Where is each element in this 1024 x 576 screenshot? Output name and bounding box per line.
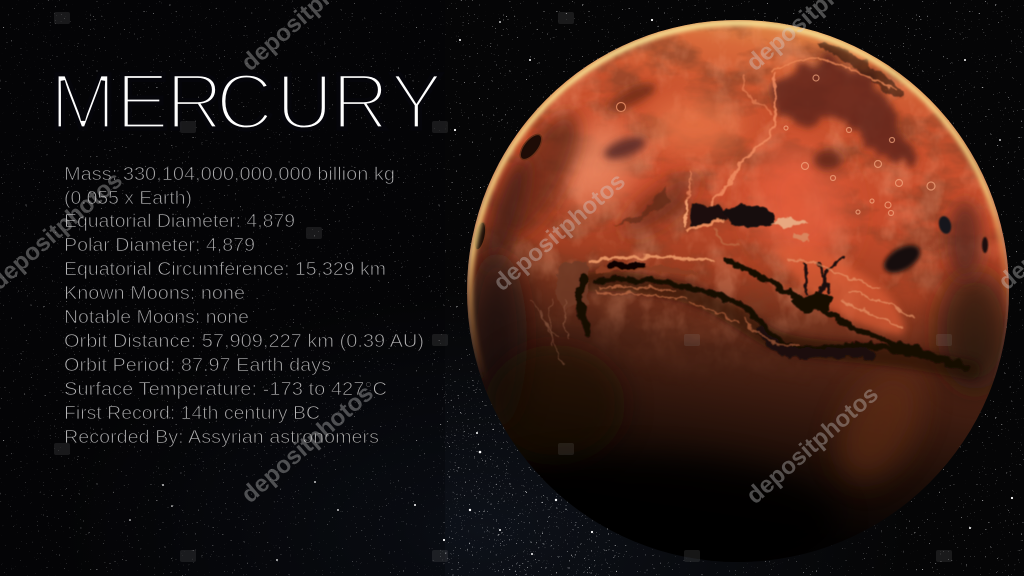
facts text block: (0.055 x Earth) bbox=[64, 187, 192, 208]
facts text block: Known Moons: none bbox=[64, 282, 245, 303]
facts text block: Mass: 330,104,000,000,000 billion kg bbox=[64, 163, 395, 184]
facts text block: Surface Temperature: -173 to 427°C bbox=[64, 378, 387, 399]
planet: craters bbox=[784, 75, 935, 216]
planet: upper canyon pits bbox=[613, 185, 810, 245]
planet: bright channel network bbox=[687, 74, 777, 220]
planet: great canyon system bbox=[530, 257, 967, 369]
facts text block: First Record: 14th century BC bbox=[64, 402, 320, 423]
facts text block: Equatorial Circumference: 15,329 km bbox=[64, 258, 386, 279]
planet: sunlit rim bbox=[467, 20, 1009, 376]
facts text block: Recorded By: Assyrian astronomers bbox=[64, 426, 379, 447]
facts text block bbox=[64, 163, 424, 447]
facts text block: Orbit Distance: 57,909,227 km (0.39 AU) bbox=[64, 330, 424, 351]
planet: dark spots and volcano bbox=[472, 102, 988, 279]
planet: bright and dark regional albedo bbox=[467, 80, 1009, 534]
facts text block: Polar Diameter: 4,879 bbox=[64, 234, 255, 255]
facts text block: Equatorial Diameter: 4,879 bbox=[64, 210, 295, 231]
planet: canyon shadow band bbox=[590, 281, 970, 370]
planet: surface texture bbox=[481, 20, 1004, 360]
watermark: depositphotos: depositphotos bbox=[741, 381, 884, 510]
watermark: depositphotos: depositphotos bbox=[236, 380, 379, 509]
facts text block: Orbit Period: 87.97 Earth days bbox=[64, 354, 331, 375]
planet bbox=[440, 20, 1013, 576]
watermark: depositphotos: depositphotos bbox=[488, 168, 631, 297]
facts text block: Notable Moons: none bbox=[64, 306, 249, 327]
planet: bright plateau bbox=[775, 246, 905, 335]
planet: dark basin upper right bbox=[772, 42, 916, 170]
title: MERCURY bbox=[50, 56, 443, 146]
